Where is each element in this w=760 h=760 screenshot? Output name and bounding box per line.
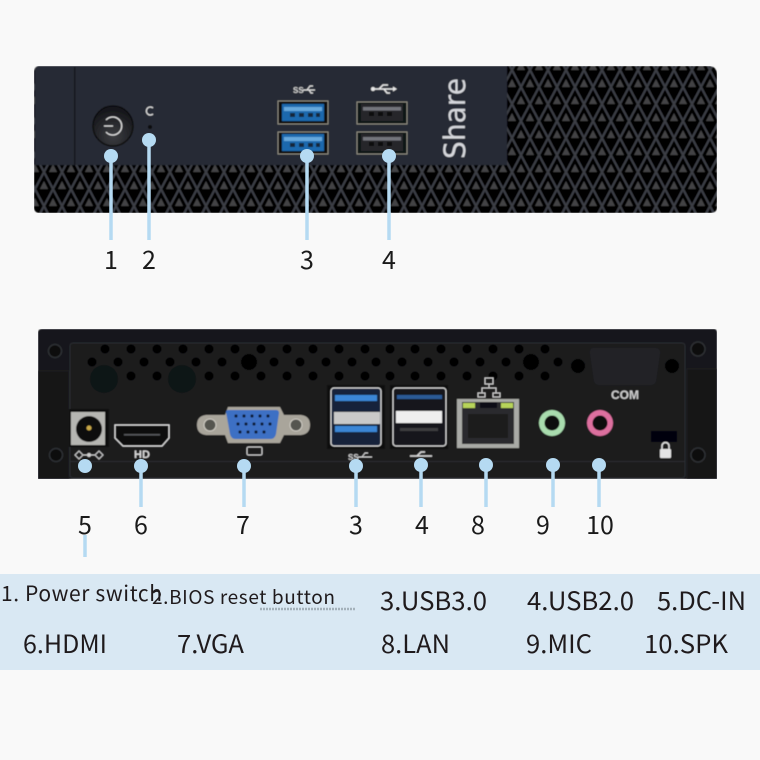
- rear number labels: 5: [78, 506, 92, 542]
- front chassis grille: [34, 66, 717, 213]
- callout 4: [382, 149, 396, 240]
- USB 3.0 icon: SS: [293, 86, 304, 95]
- panel: front view of mini PC: [34, 66, 717, 213]
- legend row 2: 10.SPK: [644, 625, 729, 661]
- callout rear 3: [349, 459, 363, 507]
- panel: rear view of mini PC: [38, 329, 717, 479]
- lock slot and icon: [651, 431, 677, 458]
- rear number labels: 7: [236, 506, 250, 542]
- rear number labels: 6: [134, 506, 148, 542]
- legend row 2: 6.HDMI: [23, 625, 107, 661]
- VGA port: [197, 407, 310, 455]
- callout 8: [479, 458, 493, 507]
- power button: [93, 106, 133, 146]
- callout 5: [78, 459, 92, 557]
- legend row 2: 7.VGA: [177, 625, 245, 661]
- HDMI port: [115, 425, 169, 461]
- rear chassis: [38, 329, 717, 479]
- callout 1: [104, 149, 118, 240]
- inner plate: [70, 343, 685, 478]
- legend row 2: 8.LAN: [381, 625, 450, 661]
- callout 6: [134, 459, 148, 507]
- legend row 2: [23, 625, 729, 661]
- USB 2.0 ports: [357, 102, 407, 154]
- legend row 1: 5.DC-IN: [657, 582, 746, 618]
- DC-IN jack: [69, 409, 109, 459]
- legend row 1: 1. Power switch: [1, 578, 162, 608]
- rear number labels: 10: [586, 506, 614, 542]
- rear number labels: 3: [349, 506, 363, 542]
- rear number labels: 8: [471, 506, 485, 542]
- LAN port: [457, 378, 519, 448]
- ventilation holes: [88, 344, 679, 380]
- HDMI port: HD: [134, 449, 150, 461]
- callout 10: [592, 458, 606, 507]
- front number labels: 3: [300, 241, 314, 277]
- callout 9: [546, 458, 560, 507]
- SPK jack: [587, 410, 613, 436]
- front number labels: 1: [104, 241, 118, 277]
- rear USB 3.0 stack: [327, 385, 385, 462]
- front number labels: 2: [142, 241, 156, 277]
- COM port cover: COM: [611, 388, 639, 402]
- front number labels: [104, 241, 396, 277]
- BIOS reset hole and icon: [146, 107, 153, 129]
- COM port cover: [590, 348, 660, 402]
- rear number labels: 4: [415, 506, 429, 542]
- callout 7: [237, 459, 251, 507]
- legend row 1: 2.BIOS reset button: [152, 583, 335, 610]
- brand logo: Share: [438, 78, 472, 159]
- legend row 1: 4.USB2.0: [527, 582, 634, 618]
- legend row 2: 9.MIC: [526, 625, 592, 661]
- legend row 1: [1, 578, 746, 618]
- front face plate: [35, 66, 507, 165]
- callout 3: [300, 149, 314, 240]
- legend band: [0, 574, 760, 670]
- rear number labels: 9: [536, 506, 550, 542]
- rubber feet: [90, 365, 196, 393]
- side brackets: [38, 369, 717, 479]
- USB 3.0 ports: [278, 101, 328, 154]
- MIC jack: [539, 410, 565, 436]
- rear USB 3.0 stack: SS: [348, 453, 359, 462]
- USB 2.0 icon: [371, 85, 397, 93]
- legend row 1: 3.USB3.0: [380, 582, 487, 618]
- rear number labels: [78, 506, 614, 542]
- screws: [48, 342, 705, 462]
- front number labels: 4: [382, 241, 396, 277]
- callout rear 4: [414, 458, 428, 507]
- callout 2: [142, 133, 156, 240]
- rear USB 2.0 stack: [390, 385, 448, 456]
- USB 3.0 icon: [293, 86, 315, 95]
